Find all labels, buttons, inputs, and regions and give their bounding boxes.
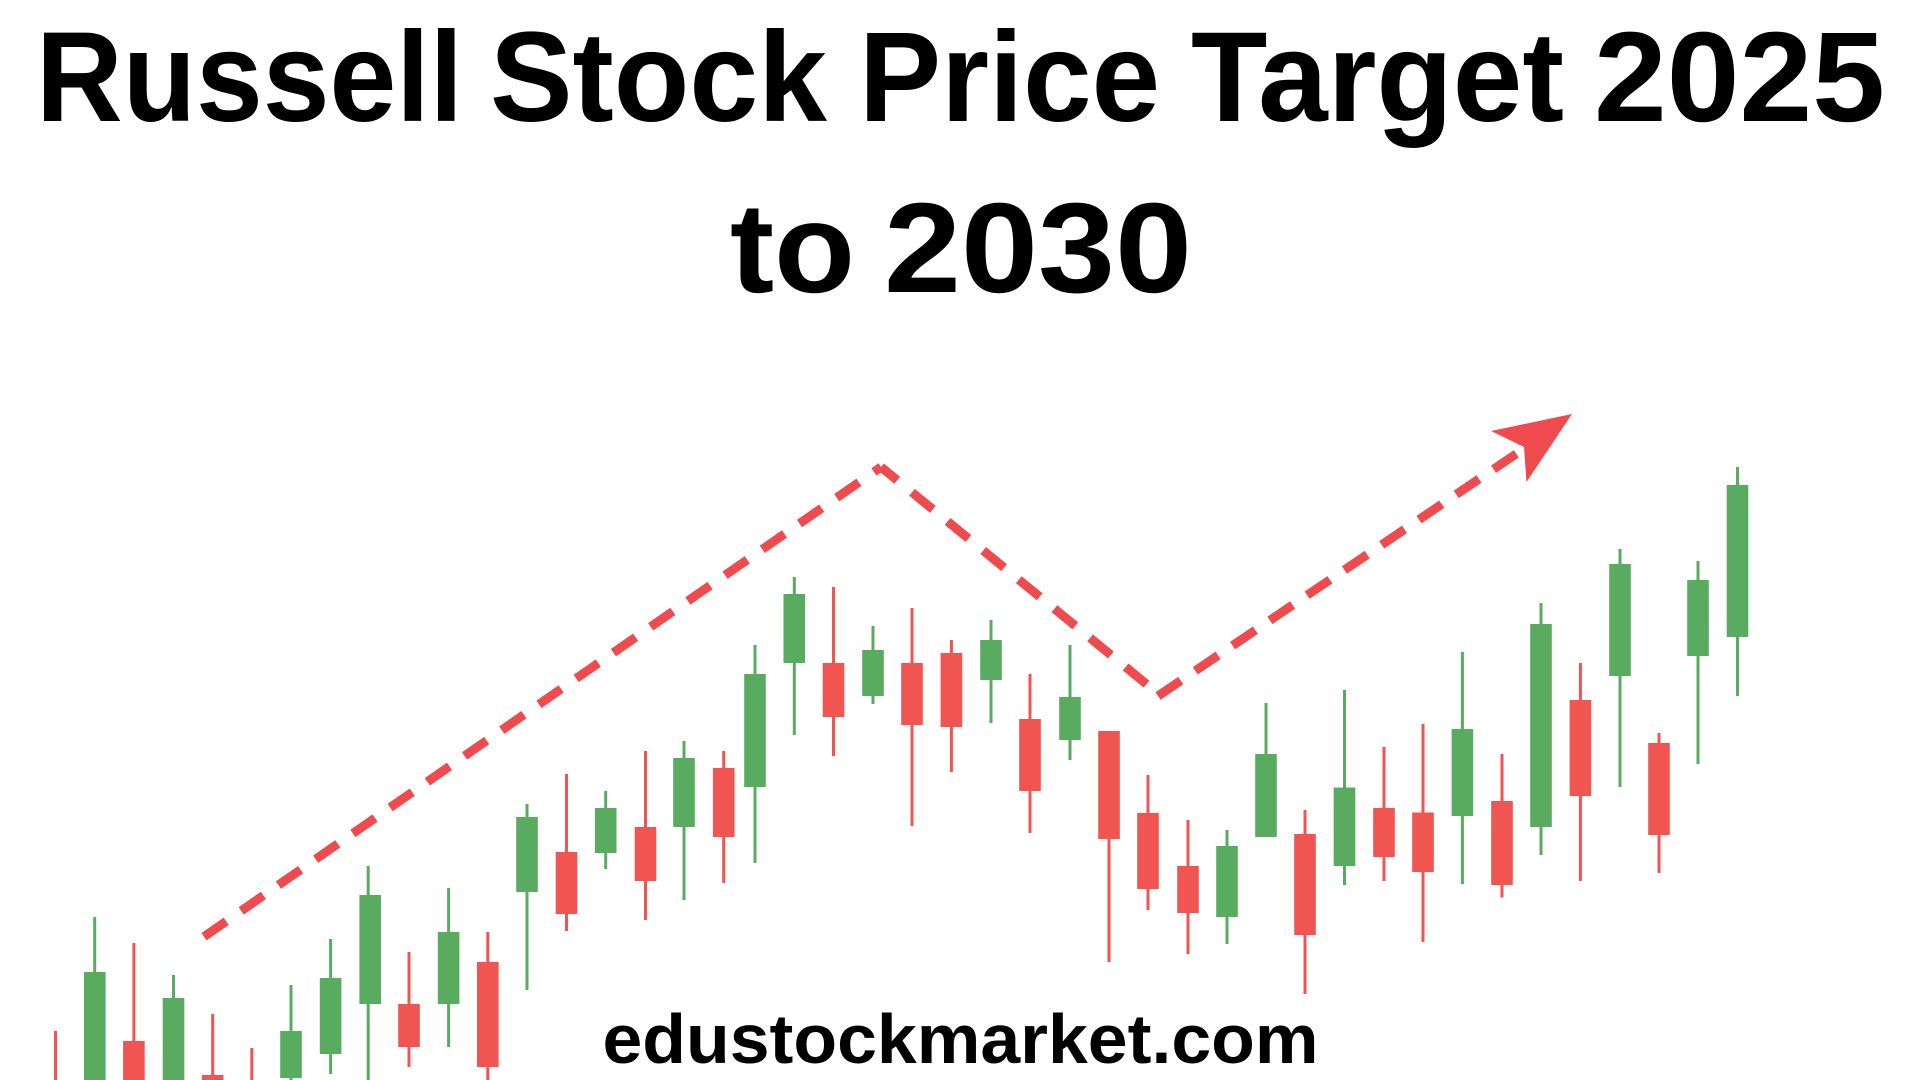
candle 42 red xyxy=(1648,733,1670,873)
candle 20 green xyxy=(784,577,805,735)
candle 10 red xyxy=(398,952,420,1067)
candle 15 green xyxy=(595,791,616,869)
candle 32 green xyxy=(1255,703,1277,837)
dashed line rising to arrow xyxy=(1158,452,1519,696)
candle 11 green xyxy=(438,888,459,1047)
candle 13 green xyxy=(516,804,538,990)
candle 28 red xyxy=(1098,731,1120,962)
candle 6 red xyxy=(250,1048,253,1080)
candle 9 green xyxy=(359,866,381,1080)
title: Price xyxy=(859,6,1160,149)
candle 38 red xyxy=(1491,754,1513,898)
title: 2025 xyxy=(1594,6,1885,149)
candle 12 red xyxy=(477,932,499,1080)
candle 5 red xyxy=(202,1014,224,1080)
candle 1 red xyxy=(54,1031,57,1080)
candlestick chart xyxy=(54,467,1748,1080)
candle 37 green xyxy=(1452,652,1473,884)
dashed trend line with arrow xyxy=(204,414,1572,937)
title: Target xyxy=(1191,6,1564,149)
candle 26 red xyxy=(1019,674,1041,833)
candle 7 green xyxy=(280,985,302,1080)
candle 23 red xyxy=(901,608,923,826)
candle 8 green xyxy=(320,939,341,1074)
candle 36 red xyxy=(1412,724,1434,942)
candle 21 red xyxy=(823,587,844,756)
candle 18 red xyxy=(713,751,734,883)
candle 30 red xyxy=(1177,820,1199,954)
website footer: edustockmarket.com xyxy=(602,1000,1318,1078)
candle 3 red xyxy=(123,943,145,1080)
candle 22 green xyxy=(862,626,884,704)
candle 43 green xyxy=(1687,561,1709,764)
icon: arrow head xyxy=(1491,414,1572,482)
candle 2 green xyxy=(84,917,106,1080)
candle 31 green xyxy=(1216,830,1238,944)
title xyxy=(36,6,1885,320)
candle 33 red xyxy=(1294,810,1316,994)
title: 2030 xyxy=(884,177,1192,320)
dashed line rising to peak xyxy=(204,467,881,937)
candle 39 green xyxy=(1530,603,1552,855)
title: Stock xyxy=(490,6,828,149)
candle 44 green xyxy=(1727,467,1748,696)
candle 4 green xyxy=(163,975,184,1080)
candle 35 red xyxy=(1373,747,1395,881)
candle 25 green xyxy=(980,620,1002,723)
candle 14 red xyxy=(556,774,577,931)
candle 19 green xyxy=(744,645,766,863)
candle 41 green xyxy=(1609,549,1631,787)
title: Russell xyxy=(36,6,463,149)
candle 34 green xyxy=(1334,690,1355,885)
candle 29 red xyxy=(1137,775,1159,910)
candle 16 red xyxy=(635,751,656,920)
dashed line falling to trough xyxy=(881,467,1147,684)
candle 40 red xyxy=(1570,663,1591,881)
candle 17 green xyxy=(673,741,695,900)
title: to xyxy=(730,177,855,320)
candle 27 green xyxy=(1059,645,1081,760)
candle 24 red xyxy=(941,640,962,772)
